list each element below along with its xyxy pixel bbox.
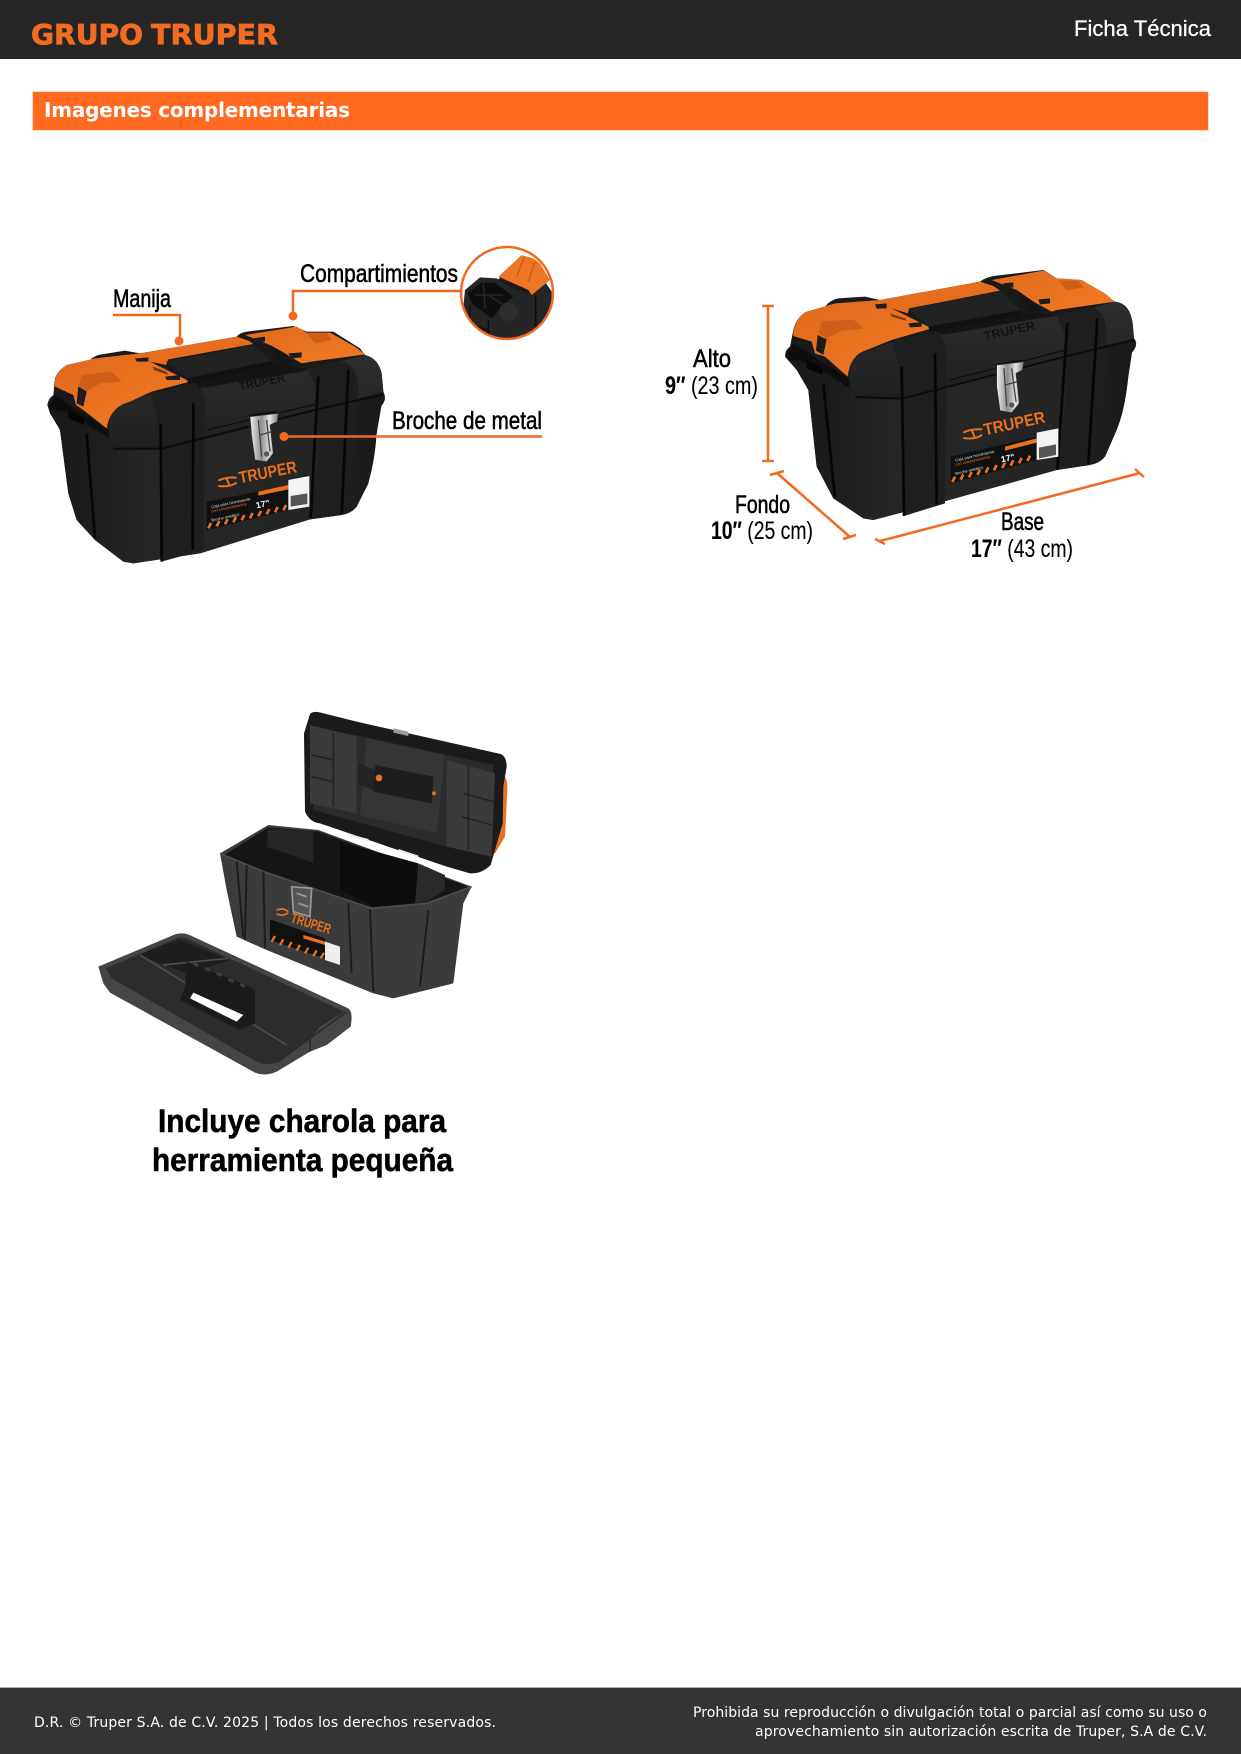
dimension: Fondo xyxy=(711,471,856,545)
callout: Compartimientos: Compartimientos xyxy=(300,260,458,288)
product photo: toolbox with dimensions xyxy=(785,270,1136,520)
footer bar xyxy=(0,1687,1241,1754)
section heading: Imagenes complementarias: Imagenes complementarias xyxy=(44,98,350,122)
logo: Grupo Truper: GRUPO xyxy=(31,19,143,51)
product label xyxy=(207,476,309,530)
product label: Broche metálico xyxy=(955,464,984,476)
product label xyxy=(951,428,1058,483)
dimension: Alto xyxy=(665,306,774,461)
product label: 17" xyxy=(1000,452,1016,464)
callout: Manija: Manija xyxy=(113,285,171,313)
toolbox brand mark xyxy=(218,457,298,487)
footer: legal notice xyxy=(693,1705,1207,1740)
logo: Grupo Truper: TRUPER xyxy=(151,19,278,51)
product photo: closed toolbox with callouts xyxy=(47,326,385,563)
header bar xyxy=(0,0,1241,59)
toolbox brand mark: TRUPER xyxy=(289,910,333,937)
box base xyxy=(220,825,472,998)
callout: Broche de metal xyxy=(280,407,542,441)
product label: 17" xyxy=(255,498,271,510)
product label: Broche metálico xyxy=(211,512,241,523)
caption: tray included: herramienta pequeña xyxy=(152,1142,453,1178)
open lid xyxy=(304,712,507,873)
caption: tray included: Incluye charola para xyxy=(158,1103,446,1139)
logo: Grupo Truper xyxy=(31,19,278,51)
footer: legal notice: aprovechamiento sin autorización escrita de Truper, S.A de C.V. xyxy=(755,1724,1207,1740)
product photo: open toolbox with removable tray xyxy=(98,712,507,1074)
section heading: Imagenes complementarias xyxy=(32,92,1208,130)
dimension: Alto: Alto xyxy=(693,345,731,373)
header label: Ficha Técnica: Ficha Técnica xyxy=(1074,16,1212,41)
inset circle: compartments detail xyxy=(460,247,553,340)
dimension: Fondo: 10″ (25 cm) xyxy=(711,517,813,545)
product photo: toolbox with dimensions: TRUPER xyxy=(983,318,1037,343)
callout: Compartimientos xyxy=(288,260,461,320)
dimension: Alto: 9″ (23 cm) xyxy=(665,372,758,400)
callout: Broche de metal: Broche de metal xyxy=(392,407,542,435)
dimension: Fondo: Fondo xyxy=(735,491,790,519)
product label: Caja para herramienta xyxy=(955,449,995,463)
toolbox brand mark: TRUPER xyxy=(982,408,1047,439)
caption: tray included xyxy=(152,1103,453,1178)
toolbox brand mark: TRUPER xyxy=(237,457,298,487)
product label: con compartimentos xyxy=(955,454,991,467)
product photo: closed toolbox with callouts: TRUPER xyxy=(238,370,287,394)
dimension: Base xyxy=(875,469,1144,563)
footer: copyright: D.R. © Truper S.A. de C.V. 2025 | Todos los derechos reservados. xyxy=(34,1715,496,1731)
dimension: Base: 17″ (43 cm) xyxy=(971,535,1073,563)
product label: con compartimentos xyxy=(211,501,247,514)
tray xyxy=(98,933,352,1074)
footer: legal notice: Prohibida su reproducción o divulgación total o parcial así como su uso o xyxy=(693,1705,1207,1721)
dimension: Base: Base xyxy=(1001,508,1044,536)
callout: Manija xyxy=(113,285,184,346)
product label: Caja para herramienta xyxy=(211,496,251,509)
